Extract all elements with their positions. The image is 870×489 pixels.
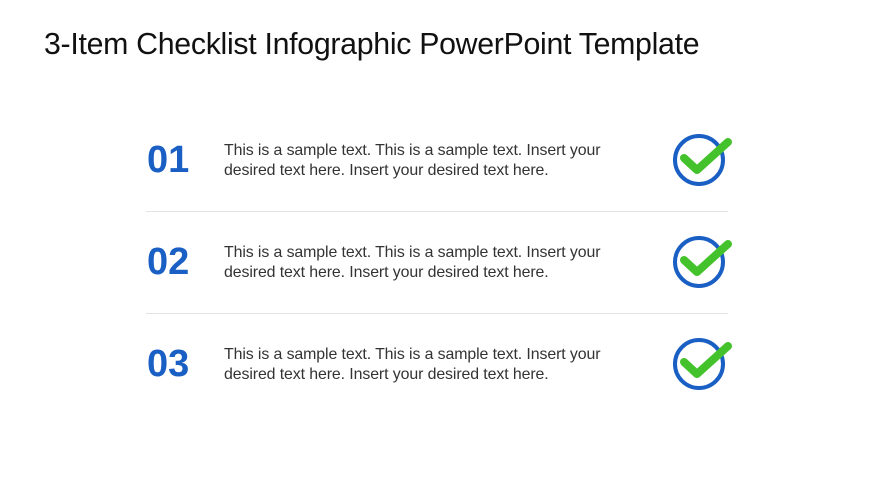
title: 3-Item Checklist Infographic PowerPoint Template — [44, 28, 699, 61]
text 3: This is a sample text. This is a sample text. Insert your — [224, 346, 600, 363]
text 3: desired text here. Insert your desired text here. — [224, 366, 549, 383]
text 2: desired text here. Insert your desired text here. — [224, 264, 549, 281]
text 1: This is a sample text. This is a sample text. Insert your — [224, 142, 600, 159]
text 2 — [224, 244, 600, 281]
icon: check 3 — [673, 338, 732, 390]
icon: check 1 — [673, 134, 732, 186]
text 2: This is a sample text. This is a sample text. Insert your — [224, 244, 600, 261]
number 01: 01 — [147, 139, 189, 181]
row 1 — [147, 134, 732, 186]
text 1 — [224, 142, 600, 179]
number 02: 02 — [147, 241, 189, 283]
number 03: 03 — [147, 343, 189, 385]
text 1: desired text here. Insert your desired text here. — [224, 162, 549, 179]
icon: check 2 — [673, 236, 732, 288]
row 3 — [147, 338, 732, 390]
text 3 — [224, 346, 600, 383]
row 2 — [147, 236, 732, 288]
